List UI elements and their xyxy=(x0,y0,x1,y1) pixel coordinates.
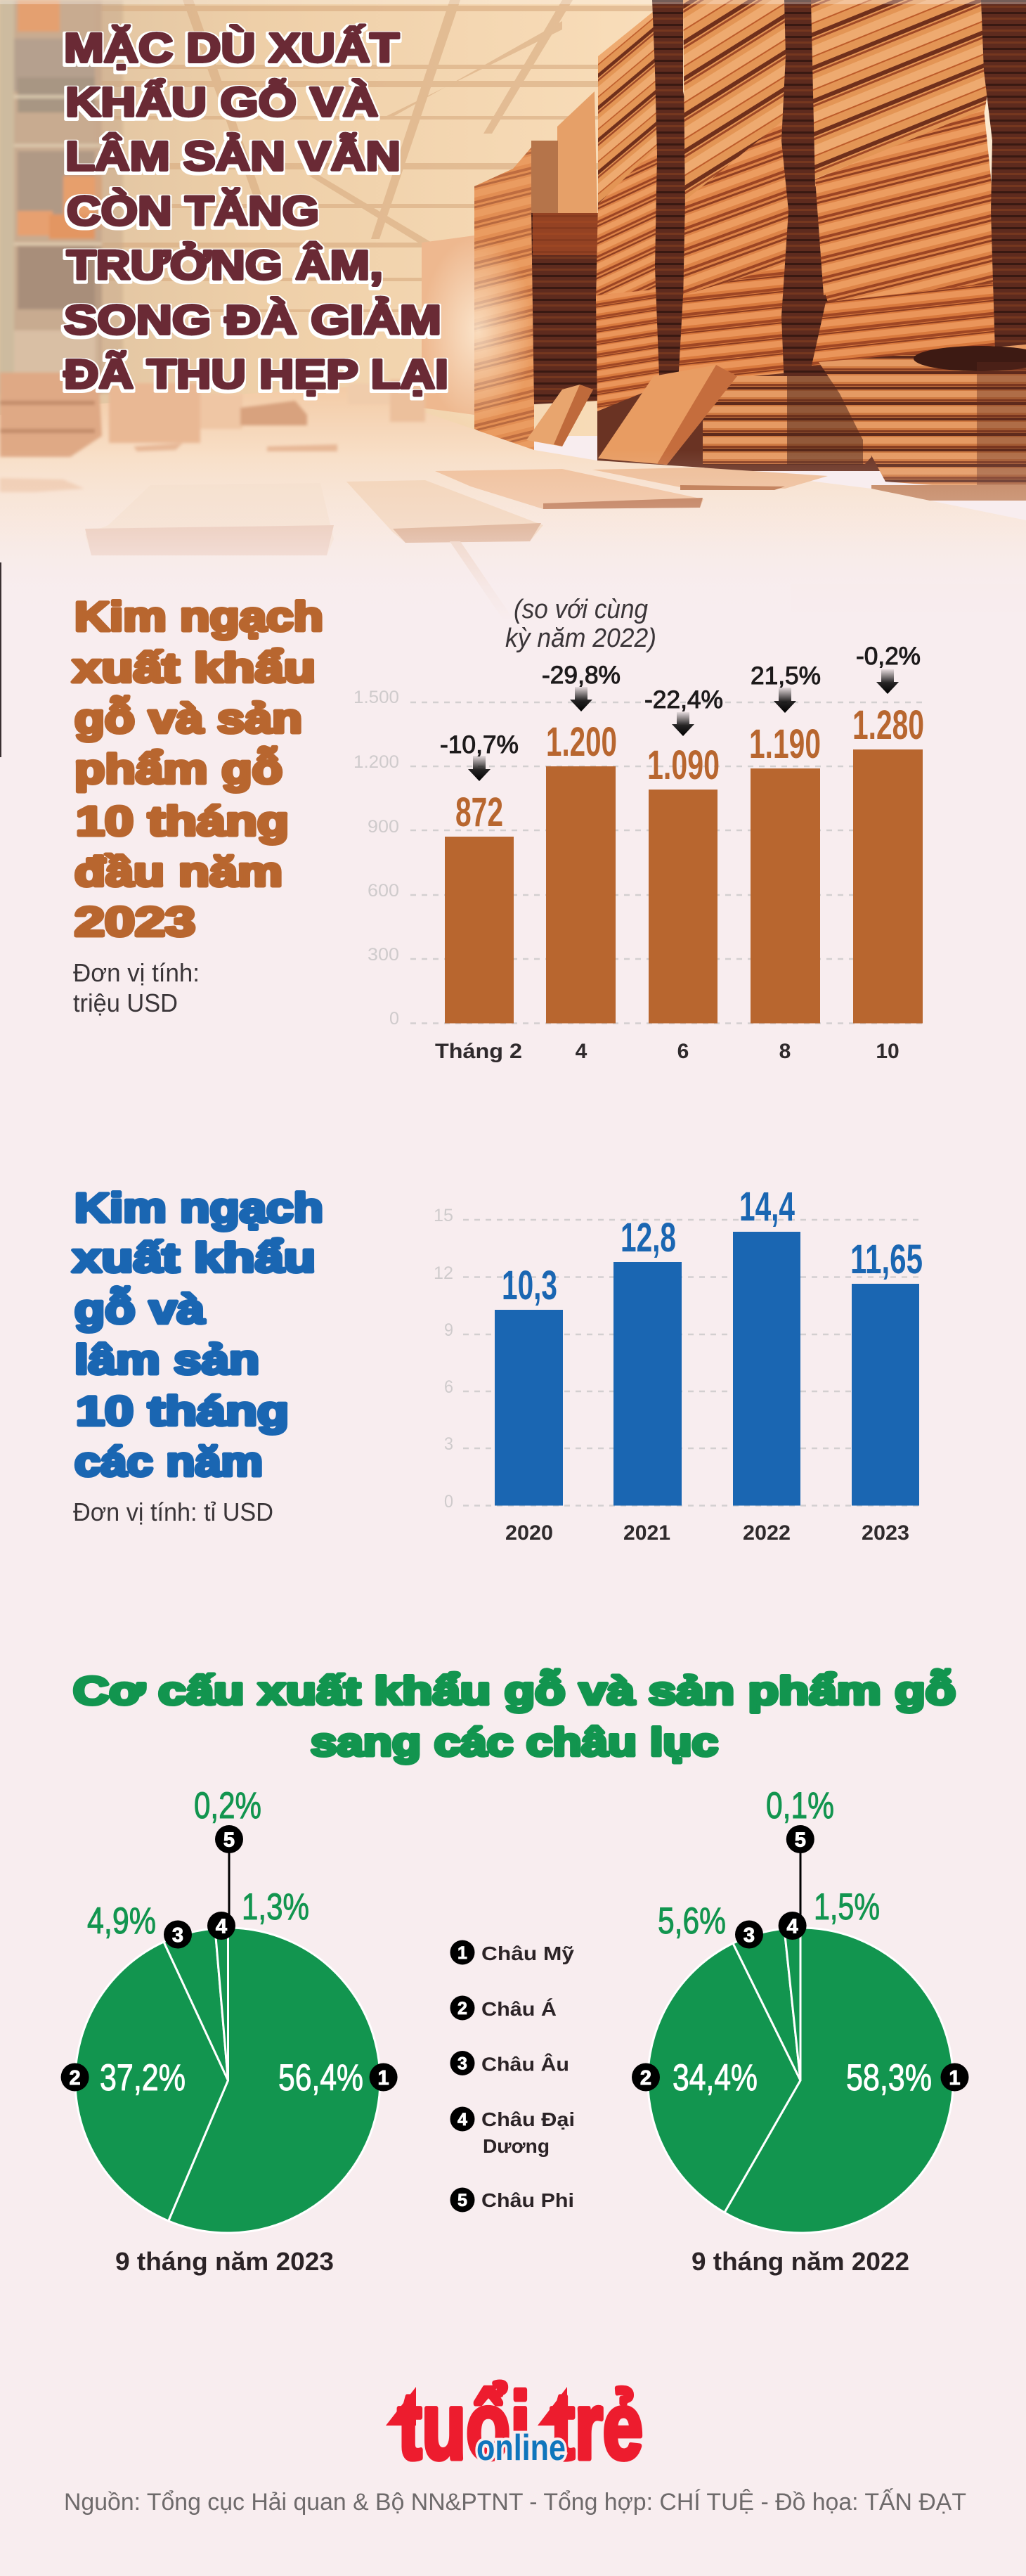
heading: wood export 10 months 2023: xuất khẩu xyxy=(72,645,316,691)
legend: continents: Châu Phi xyxy=(481,2189,574,2211)
title: MẶC DÙ XUẤT xyxy=(64,25,399,71)
heading: wood and forest products export: 10 tháng xyxy=(76,1389,289,1434)
left edge dark stroke xyxy=(0,562,1,757)
lower tiers xyxy=(703,376,871,465)
bar chart: yearly export: 14,4 xyxy=(739,1184,795,1230)
bar chart: monthly wood export: -22,4% xyxy=(644,686,723,714)
bar chart: monthly wood export: 1.200 xyxy=(546,719,617,765)
legend: continents: 2 xyxy=(457,1999,467,2018)
bar chart: monthly wood export: Tháng 2 xyxy=(435,1040,522,1063)
bar chart: monthly wood export: 6 xyxy=(677,1040,689,1063)
source line: Nguồn: Tổng cục Hải quan & Bộ NN&PTNT - Tổng hợp: CHÍ TUỆ - Đồ họa: TẤN ĐẠT xyxy=(64,2489,966,2516)
bar chart: monthly wood export: 1.280 xyxy=(852,702,924,748)
logo: tuoi tre online: tuổi trẻ xyxy=(398,2373,643,2479)
legend: continents xyxy=(450,1940,575,2212)
heading: export structure by continent xyxy=(73,1668,956,1764)
bar chart: yearly export: 15 xyxy=(434,1206,453,1225)
pie chart: 9 months 2022 xyxy=(632,1785,968,2276)
pie chart: 9 months 2022: 0,1% xyxy=(766,1785,834,1827)
legend: continents: Dương xyxy=(483,2135,550,2157)
title: SONG ĐÀ GIẢM xyxy=(64,297,441,343)
hero illustration: wood warehouse xyxy=(0,0,1026,622)
pie chart: 9 months 2022: 9 tháng năm 2022 xyxy=(691,2247,909,2276)
pie chart: 9 months 2023: 1 xyxy=(378,2067,389,2089)
floor xyxy=(0,387,1026,619)
bar chart: monthly wood export: 1.090 xyxy=(647,742,720,788)
bar chart: monthly wood export xyxy=(353,643,924,1063)
title: LÂM SẢN VẪN xyxy=(65,134,401,179)
bar chart: monthly wood export: 1.500 xyxy=(353,688,399,707)
dark gap BC xyxy=(652,0,692,376)
heading: wood export 10 months 2023: đầu năm xyxy=(74,849,283,895)
heading: export structure by continent: sang các châu lục xyxy=(311,1720,718,1764)
pie chart: 9 months 2022: 2 xyxy=(640,2067,651,2089)
pie chart: 9 months 2022: 4 xyxy=(787,1915,798,1938)
title: CÒN TĂNG xyxy=(67,188,319,234)
pie chart: 9 months 2023: 9 tháng năm 2023 xyxy=(115,2247,334,2276)
bar chart: monthly wood export: 300 xyxy=(368,945,399,965)
title: KHẨU GỖ VÀ xyxy=(65,79,378,125)
bar chart: monthly wood export: -29,8% xyxy=(542,662,621,689)
bar chart: monthly wood export: 21,5% xyxy=(751,662,821,690)
pie chart: 9 months 2023: 5 xyxy=(223,1829,235,1852)
legend: continents: Châu Đại xyxy=(481,2108,575,2130)
pie chart: 9 months 2022: 3 xyxy=(743,1924,755,1947)
bar chart: monthly wood export: 900 xyxy=(368,817,399,837)
bar chart: yearly export: 2020 xyxy=(505,1521,553,1545)
heading: wood and forest products export xyxy=(72,1185,323,1485)
pie chart: 9 months 2023: 2 xyxy=(70,2067,81,2089)
unit note: million USD xyxy=(73,958,200,1017)
pie chart: 9 months 2022: 5,6% xyxy=(658,1900,726,1942)
bar chart: yearly export: 2022 xyxy=(743,1521,791,1545)
legend: continents: 5 xyxy=(457,2191,467,2210)
bar chart: yearly export xyxy=(434,1184,923,1545)
bar chart: monthly wood export: 10 xyxy=(876,1040,900,1063)
roof beams xyxy=(91,0,724,312)
pie chart: 9 months 2023: 3 xyxy=(172,1924,183,1947)
pie chart: 9 months 2023: 4 xyxy=(216,1915,227,1938)
logo: tuoi tre online: online xyxy=(476,2428,566,2468)
bar chart: yearly export: 0 xyxy=(444,1492,453,1512)
title xyxy=(64,25,448,397)
left shelving xyxy=(0,0,123,394)
pie chart: 9 months 2022: 1 xyxy=(949,2067,961,2089)
comparison note: kỳ năm 2022) xyxy=(505,624,656,653)
pie chart: 9 months 2023: 1,3% xyxy=(242,1886,309,1928)
pie chart: 9 months 2023: 4,9% xyxy=(87,1900,156,1942)
floor boards and pallets xyxy=(85,468,1026,619)
bar chart: monthly wood export: 0 xyxy=(389,1009,399,1029)
heading: wood export 10 months 2023: phẩm gỗ xyxy=(74,747,283,792)
heading: wood export 10 months 2023: 2023 xyxy=(74,899,195,945)
dark gap AB xyxy=(781,0,864,457)
bar chart: yearly export: 2023 xyxy=(862,1521,909,1545)
legend: continents: Châu Âu xyxy=(481,2053,569,2075)
heading: wood and forest products export: Kim ngạch xyxy=(74,1185,323,1231)
comparison note: (so với cùng xyxy=(514,595,648,624)
legend: continents: 4 xyxy=(457,2110,467,2130)
pie chart: 9 months 2022: 34,4% xyxy=(673,2057,758,2099)
bar chart: monthly wood export: -0,2% xyxy=(856,643,921,670)
bar chart: yearly export: 9 xyxy=(444,1320,453,1340)
heading: export structure by continent: Cơ cấu xuất khẩu gỗ và sản phẩm gỗ xyxy=(73,1668,956,1713)
bar chart: monthly wood export: 872 xyxy=(455,790,503,835)
pie chart: 9 months 2023: 0,2% xyxy=(194,1785,261,1827)
title: TRƯỞNG ÂM, xyxy=(67,243,383,288)
title: ĐÃ THU HẸP LẠI xyxy=(64,352,448,397)
lower stack base xyxy=(597,352,1026,471)
heading: wood export 10 months 2023: 10 tháng xyxy=(76,799,289,844)
bar chart: monthly wood export: 600 xyxy=(368,881,399,901)
bar chart: yearly export: 6 xyxy=(444,1377,453,1397)
heading: wood export 10 months 2023: Kim ngạch xyxy=(74,594,323,640)
heading: wood export 10 months 2023 xyxy=(72,594,323,945)
dark pillar right xyxy=(981,0,1026,366)
bar chart: yearly export: 11,65 xyxy=(850,1237,923,1282)
legend: continents: 1 xyxy=(457,1943,467,1963)
legend: continents: Châu Á xyxy=(481,1998,557,2020)
bar chart: yearly export: 12,8 xyxy=(621,1215,676,1261)
heading: wood export 10 months 2023: gỗ và sản xyxy=(74,696,302,742)
pie chart: 9 months 2023: 56,4% xyxy=(278,2057,363,2099)
stack A xyxy=(811,0,992,186)
leaned boards xyxy=(598,365,737,465)
legend: continents: 3 xyxy=(457,2054,467,2074)
heading: wood and forest products export: xuất khẩu xyxy=(72,1235,316,1281)
bar chart: monthly wood export: -10,7% xyxy=(440,731,519,759)
bottom fade xyxy=(0,450,1026,622)
bar chart: monthly wood export: 4 xyxy=(576,1040,587,1063)
legend: continents: Châu Mỹ xyxy=(481,1943,574,1964)
far stacks xyxy=(422,236,474,415)
bar chart: yearly export: 10,3 xyxy=(502,1263,557,1308)
stack B xyxy=(683,0,788,211)
heading: wood and forest products export: gỗ và xyxy=(74,1287,205,1332)
comparison note xyxy=(505,595,656,653)
pie chart: 9 months 2022: 1,5% xyxy=(814,1886,880,1928)
pie chart: 9 months 2023: 37,2% xyxy=(100,2057,186,2099)
stack D xyxy=(557,91,597,214)
unit note: million USD: Đơn vị tính: xyxy=(73,958,200,987)
pie chart: 9 months 2022: 5 xyxy=(795,1829,806,1852)
left pallets xyxy=(0,373,425,492)
bar chart: monthly wood export: 1.200 xyxy=(353,752,399,772)
heading: wood and forest products export: lâm sản xyxy=(74,1337,259,1383)
pie chart: 9 months 2023 xyxy=(61,1785,398,2276)
unit note: billion USD: Đơn vị tính: tỉ USD xyxy=(73,1498,273,1526)
heading: wood and forest products export: các năm xyxy=(74,1439,263,1485)
bar chart: yearly export: 12 xyxy=(434,1263,453,1283)
unit note: million USD: triệu USD xyxy=(73,988,178,1017)
stack C xyxy=(598,8,664,211)
bar chart: yearly export: 3 xyxy=(444,1434,453,1454)
pie chart: 9 months 2022: 58,3% xyxy=(846,2057,932,2099)
bar chart: monthly wood export: 1.190 xyxy=(749,721,821,767)
bar chart: monthly wood export: 8 xyxy=(779,1040,791,1063)
bar chart: yearly export: 2021 xyxy=(623,1521,670,1545)
